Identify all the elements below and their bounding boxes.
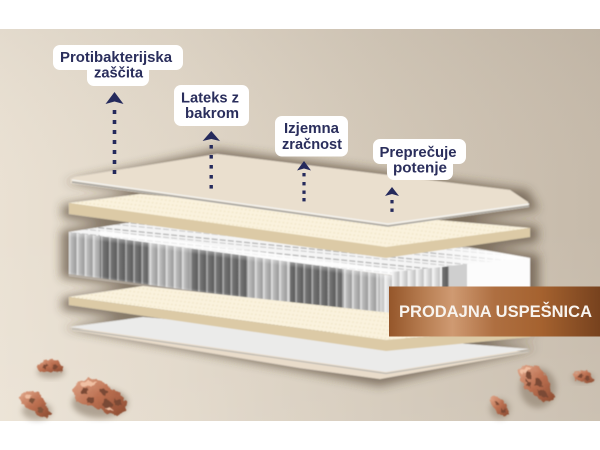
label: Protibakterijska zaščita: Protibakterijska [60, 49, 173, 66]
label: Preprečuje potenje: potenje [393, 160, 447, 176]
mattress exploded layers [61, 149, 539, 386]
copper nugget far right [572, 370, 594, 383]
arrow: prevents sweating [385, 187, 399, 212]
copper nugget small left top [37, 359, 65, 378]
label: Preprečuje potenje [373, 139, 466, 180]
spring side tubes [392, 266, 449, 308]
label: Izjemna zračnost [275, 116, 348, 156]
spring front tubes [69, 226, 392, 320]
label: Protibakterijska zaščita [53, 45, 183, 86]
spring unit [69, 222, 530, 320]
copper nugget bottom right small [490, 396, 510, 419]
copper nugget bottom centre [72, 378, 128, 418]
top cover layer [71, 154, 529, 227]
arrow: antibacterial [106, 92, 124, 174]
label: Lateks z bakrom: Lateks z [181, 90, 239, 106]
layer shadows [61, 149, 539, 386]
banner: bestseller [389, 286, 600, 336]
arrow: breathability [297, 161, 311, 201]
label: Lateks z bakrom: bakrom [185, 105, 239, 122]
label: Protibakterijska zaščita: zaščita [94, 64, 144, 82]
label: Lateks z bakrom [174, 85, 249, 126]
label: Izjemna zračnost: zračnost [282, 136, 342, 153]
label: Preprečuje potenje: Preprečuje [380, 144, 456, 161]
copper nugget bottom left [20, 391, 52, 420]
lower latex layer [69, 286, 530, 351]
upper latex layer [69, 194, 530, 258]
banner: bestseller: PRODAJNA USPEŠNICA [399, 302, 592, 321]
foam edge block [449, 264, 467, 292]
copper nugget right large [518, 365, 556, 408]
label: Izjemna zračnost: Izjemna [284, 120, 340, 137]
spring top grid [69, 222, 530, 275]
bottom layer [70, 317, 529, 379]
arrow: copper latex [203, 131, 220, 189]
